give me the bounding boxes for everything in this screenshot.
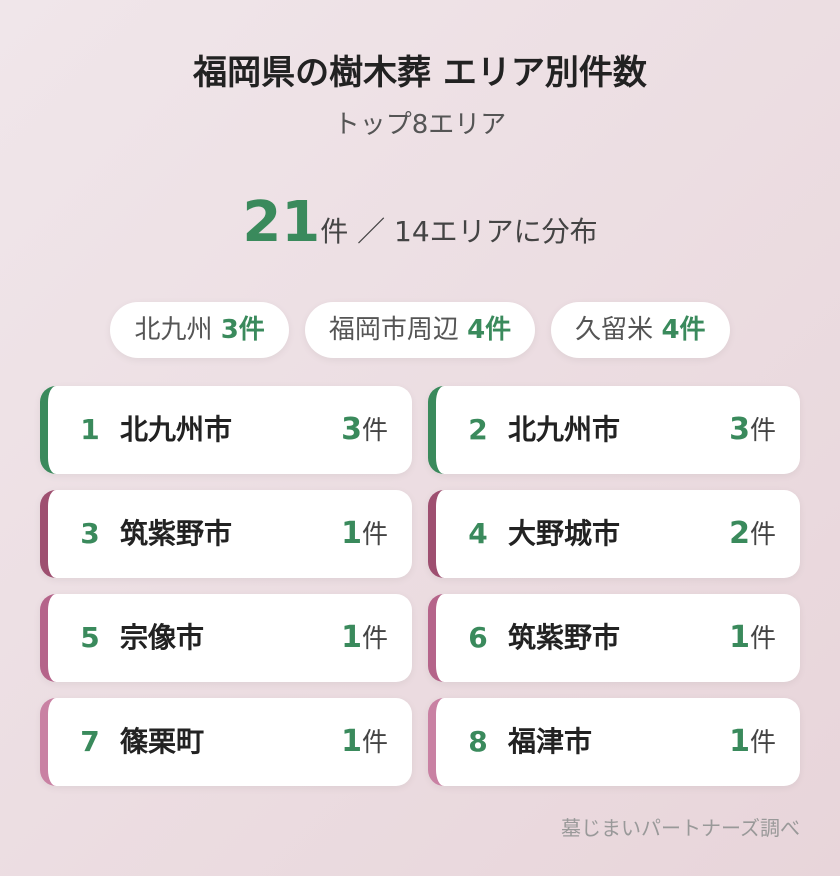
card: rank 1 xyxy=(40,386,412,474)
card: rank 3: 3 xyxy=(80,517,100,550)
card: rank 7: 篠栗町 xyxy=(120,725,204,758)
title: 福岡県の樹木葬 エリア別件数 xyxy=(193,53,647,93)
card: rank 7: 7 xyxy=(80,725,100,758)
pill: Kitakyushu: 北九州 3件 xyxy=(134,315,265,345)
card: rank 2: 北九州市 xyxy=(508,413,620,446)
card: rank 4: 大野城市 xyxy=(508,517,620,550)
card: rank 8: 福津市 xyxy=(508,725,592,758)
card: rank 8: 1件 xyxy=(729,724,776,759)
pill: Fukuoka area: 福岡市周辺 4件 xyxy=(329,315,511,345)
pill: Kurume xyxy=(551,302,730,358)
pill: Kurume: 久留米 4件 xyxy=(575,315,706,345)
summary statistic: 21件 ／ 14エリアに分布 xyxy=(242,190,598,255)
card: rank 3: 筑紫野市 xyxy=(120,517,232,550)
card: rank 2: 2 xyxy=(468,413,488,446)
card: rank 5: 宗像市 xyxy=(120,621,204,654)
card: rank 6: 6 xyxy=(468,621,488,654)
card: rank 1: 1 xyxy=(80,413,100,446)
card: rank 8: 8 xyxy=(468,725,488,758)
card: rank 2: 3件 xyxy=(729,412,776,447)
card: rank 2 xyxy=(428,386,800,474)
pill: Fukuoka area xyxy=(305,302,535,358)
card: rank 6 xyxy=(428,594,800,682)
card: rank 6: 1件 xyxy=(729,620,776,655)
card: rank 4: 2件 xyxy=(729,516,776,551)
card: rank 4 xyxy=(428,490,800,578)
subtitle: トップ8エリア xyxy=(334,110,506,140)
card: rank 1: 北九州市 xyxy=(120,413,232,446)
card: rank 4: 4 xyxy=(468,517,488,550)
card: rank 5: 1件 xyxy=(341,620,388,655)
pill: Kitakyushu xyxy=(110,302,289,358)
card: rank 5 xyxy=(40,594,412,682)
card: rank 8 xyxy=(428,698,800,786)
regional summary pills xyxy=(110,302,730,359)
card: rank 5: 5 xyxy=(80,621,100,654)
card: rank 3 xyxy=(40,490,412,578)
card: rank 1: 3件 xyxy=(341,412,388,447)
card: rank 6: 筑紫野市 xyxy=(508,621,620,654)
card: rank 7 xyxy=(40,698,412,786)
source note: 墓じまいパートナーズ調べ xyxy=(561,816,800,840)
card: rank 7: 1件 xyxy=(341,724,388,759)
card: rank 3: 1件 xyxy=(341,516,388,551)
